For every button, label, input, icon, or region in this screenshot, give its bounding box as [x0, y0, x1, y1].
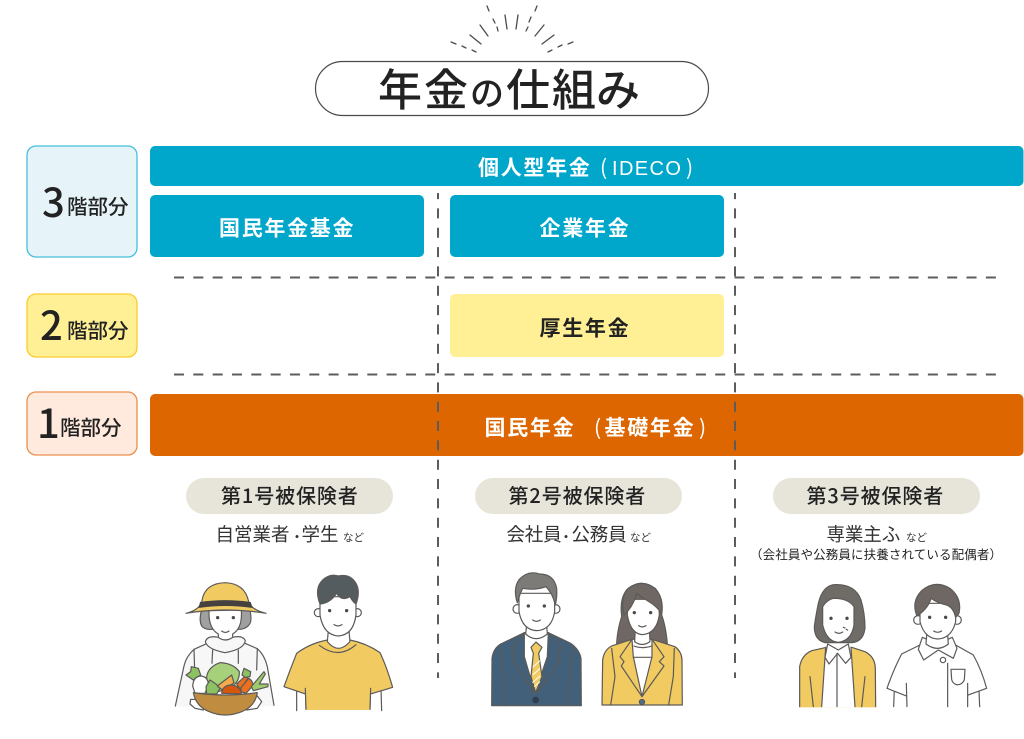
column heading: 第1号被保険者 — [186, 478, 393, 514]
description: 会社員・公務員など: 公務員 — [572, 521, 626, 547]
bar: 厚生年金 — [450, 294, 724, 357]
illustration: farmer with vegetable bowl — [175, 583, 274, 715]
description: 専業主ふなど: （会社員や公務員に扶養されている配偶者） — [750, 544, 1002, 563]
dashed vertical dividers — [438, 193, 735, 678]
illustration: businesswoman in yellow jacket — [602, 583, 682, 705]
description: 専業主ふなど: 専業主ふ — [826, 521, 900, 547]
column heading: 第2号被保険者: 第2号被保険者 — [508, 480, 646, 509]
title: 年 — [378, 54, 422, 118]
icon: sunburst above title — [451, 6, 573, 52]
bar: 企業年金 — [450, 195, 724, 257]
description: 自営業者・学生など: 学生 — [302, 521, 339, 547]
bar: 個人型年金（IDECO） — [150, 146, 1024, 186]
bar: 企業年金: 企業年金 — [540, 212, 630, 242]
level label: 2階部分: 階部分 — [67, 314, 129, 344]
title: 組 — [552, 54, 596, 118]
title: 仕 — [506, 54, 550, 118]
column heading: 第2号被保険者 — [475, 478, 682, 514]
level label: 1階部分: 1 — [37, 392, 60, 450]
bar: 国民年金（基礎年金） — [150, 394, 1024, 456]
level label: 2階部分: 2 — [40, 294, 63, 352]
dashed horizontal dividers — [174, 278, 1000, 374]
description: 自営業者・学生など: 自営業者 — [216, 521, 290, 547]
level label: 1階部分 — [27, 392, 137, 455]
column heading: 第1号被保険者: 第1号被保険者 — [221, 480, 359, 509]
description: 会社員・公務員など — [506, 521, 651, 547]
bar: 個人型年金（IDECO）: IDECO — [612, 158, 682, 180]
column heading: 第3号被保険者: 第3号被保険者 — [806, 480, 944, 509]
illustration: homemaker woman in yellow cardigan — [800, 585, 876, 707]
level label: 3階部分 — [27, 146, 137, 257]
illustration: young man in yellow T-shirt — [284, 575, 393, 711]
level label: 3階部分: 3 — [42, 171, 65, 229]
title: の — [470, 66, 504, 116]
description: 専業主ふなど — [750, 521, 1002, 563]
description: 自営業者・学生など: など — [343, 530, 364, 545]
description: 会社員・公務員など: 会社員 — [506, 521, 561, 547]
description: 自営業者・学生など — [216, 521, 364, 547]
bar: 個人型年金（IDECO）: ) — [686, 152, 693, 182]
description: 自営業者・学生など: ・ — [291, 528, 303, 545]
title: み — [596, 54, 640, 118]
column heading: 第3号被保険者 — [773, 478, 980, 514]
title — [316, 54, 708, 118]
description: 専業主ふなど: など — [906, 530, 927, 545]
bar: 国民年金（基礎年金）: 国民年金 — [484, 412, 575, 442]
bar: 国民年金基金: 国民年金基金 — [219, 212, 355, 242]
bar: 個人型年金（IDECO）: 個人型年金 — [478, 152, 592, 182]
bar: 国民年金（基礎年金）: ( — [594, 412, 603, 442]
bar: 厚生年金: 厚生年金 — [540, 312, 630, 342]
bar: 個人型年金（IDECO）: ( — [600, 152, 607, 182]
illustration: businessman in navy suit — [492, 573, 581, 706]
title: 金 — [424, 54, 468, 118]
illustration: young man in white care uniform — [887, 584, 987, 707]
description: 会社員・公務員など: など — [630, 530, 651, 545]
level label: 2階部分 — [27, 294, 137, 357]
description: 会社員・公務員など: ・ — [560, 528, 572, 545]
bar: 国民年金基金 — [150, 195, 424, 257]
level label: 3階部分: 階部分 — [67, 190, 129, 220]
bar: 国民年金（基礎年金）: ) — [699, 412, 708, 442]
level label: 1階部分: 階部分 — [60, 411, 122, 441]
bar: 国民年金（基礎年金）: 基礎年金 — [604, 412, 695, 442]
